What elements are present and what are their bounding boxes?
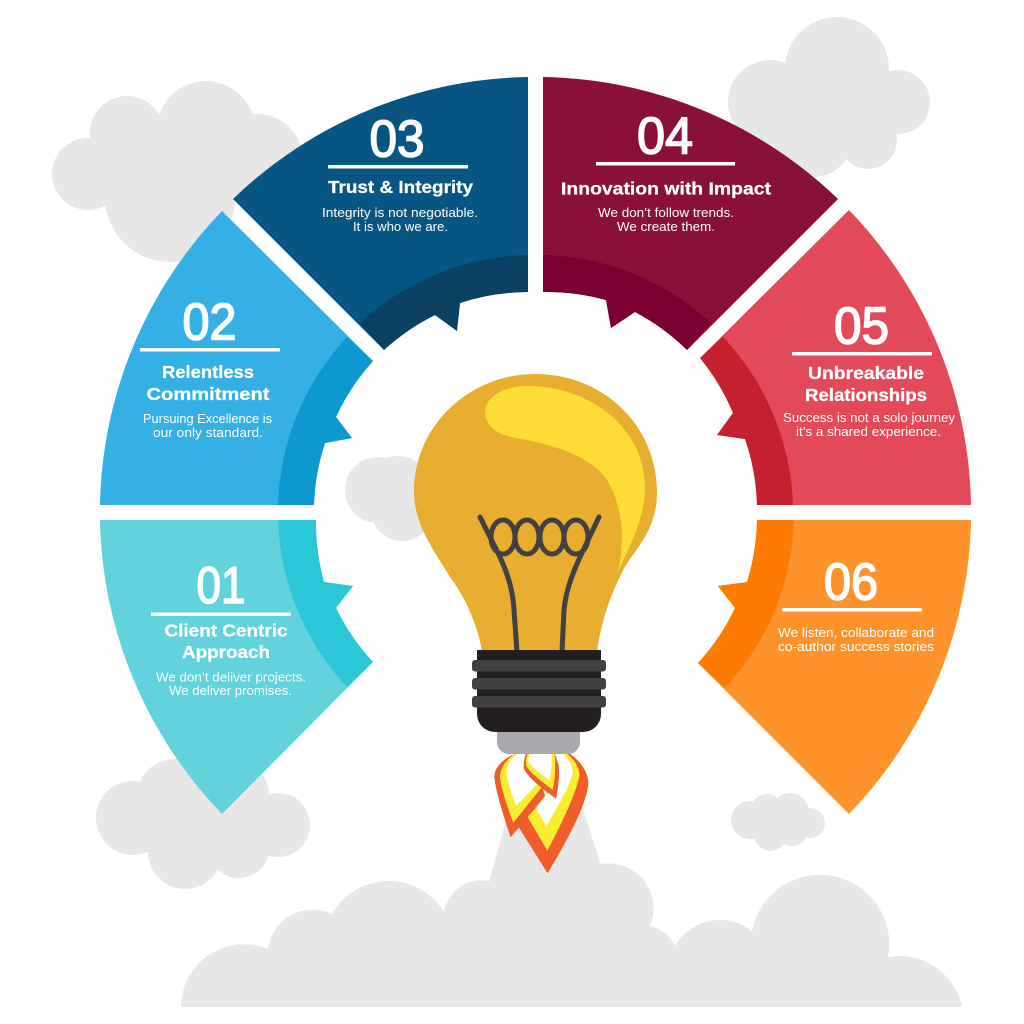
heading 03: Trust & Integrity — [328, 177, 473, 197]
rule 04 — [596, 162, 735, 166]
heading 02: Relentless — [162, 362, 254, 382]
rule 01 — [151, 612, 291, 616]
heading 05: Unbreakable — [808, 363, 924, 383]
screw base — [477, 650, 601, 732]
panel: 03 trust and integrity — [233, 77, 528, 350]
cloud: top left — [52, 81, 303, 262]
number 06: 06 — [824, 554, 878, 612]
heading 01 line 2: Approach — [182, 642, 270, 662]
number 05: 05 — [834, 298, 889, 356]
rule 06 — [782, 608, 922, 612]
description 02: Pursuing Excellence is — [143, 412, 272, 426]
description 05 line 2: it’s a shared experience. — [796, 425, 941, 439]
filament — [480, 517, 599, 652]
number 02: 02 — [182, 294, 236, 352]
panel: 06 listen and collaborate — [698, 520, 971, 814]
icon: flames — [494, 753, 588, 873]
heading 01: Client Centric — [164, 620, 288, 640]
panel: 02 relentless commitment — [100, 211, 373, 505]
panel: 04 innovation with impact — [543, 77, 838, 350]
rule 03 — [328, 165, 468, 168]
grey collar — [497, 728, 580, 754]
description 06 line 2: co-author success stories — [778, 640, 934, 654]
number 03: 03 — [370, 110, 424, 168]
cloud: bottom left — [96, 759, 310, 889]
icon: light bulb — [414, 374, 657, 754]
cloud: small right — [731, 793, 825, 851]
base ring 1 — [472, 660, 606, 672]
rule 05 — [792, 352, 932, 356]
bulb highlight — [485, 386, 645, 572]
description 04: We don’t follow trends. — [598, 206, 734, 220]
base ring 2 — [472, 678, 606, 690]
base ring 3 — [472, 696, 606, 708]
description 01 line 2: We deliver promises. — [169, 684, 292, 698]
description 03: Integrity is not negotiable. — [322, 206, 478, 220]
description 01: We don’t deliver projects. — [156, 670, 306, 684]
description 02 line 2: our only standard. — [153, 426, 263, 440]
heading 02 line 2: Commitment — [146, 384, 270, 404]
number 04: 04 — [637, 108, 693, 166]
description 04 line 2: We create them. — [617, 220, 715, 234]
cloud: centre behind bulb — [345, 456, 433, 541]
description 06: We listen, collaborate and — [778, 626, 934, 640]
rule 02 — [140, 348, 280, 352]
panel: 05 unbreakable relationships — [700, 210, 971, 505]
heading 05 line 2: Relationships — [805, 385, 927, 405]
cloud: top right — [728, 17, 930, 177]
bulb glass — [414, 374, 657, 652]
cloud: bottom smoke bank — [181, 770, 962, 1007]
number 01: 01 — [196, 557, 246, 615]
description 03 line 2: It is who we are. — [353, 220, 448, 234]
panel: 01 client centric — [100, 520, 373, 814]
heading 04: Innovation with Impact — [561, 178, 771, 198]
description 05: Success is not a solo journey — [783, 411, 956, 425]
